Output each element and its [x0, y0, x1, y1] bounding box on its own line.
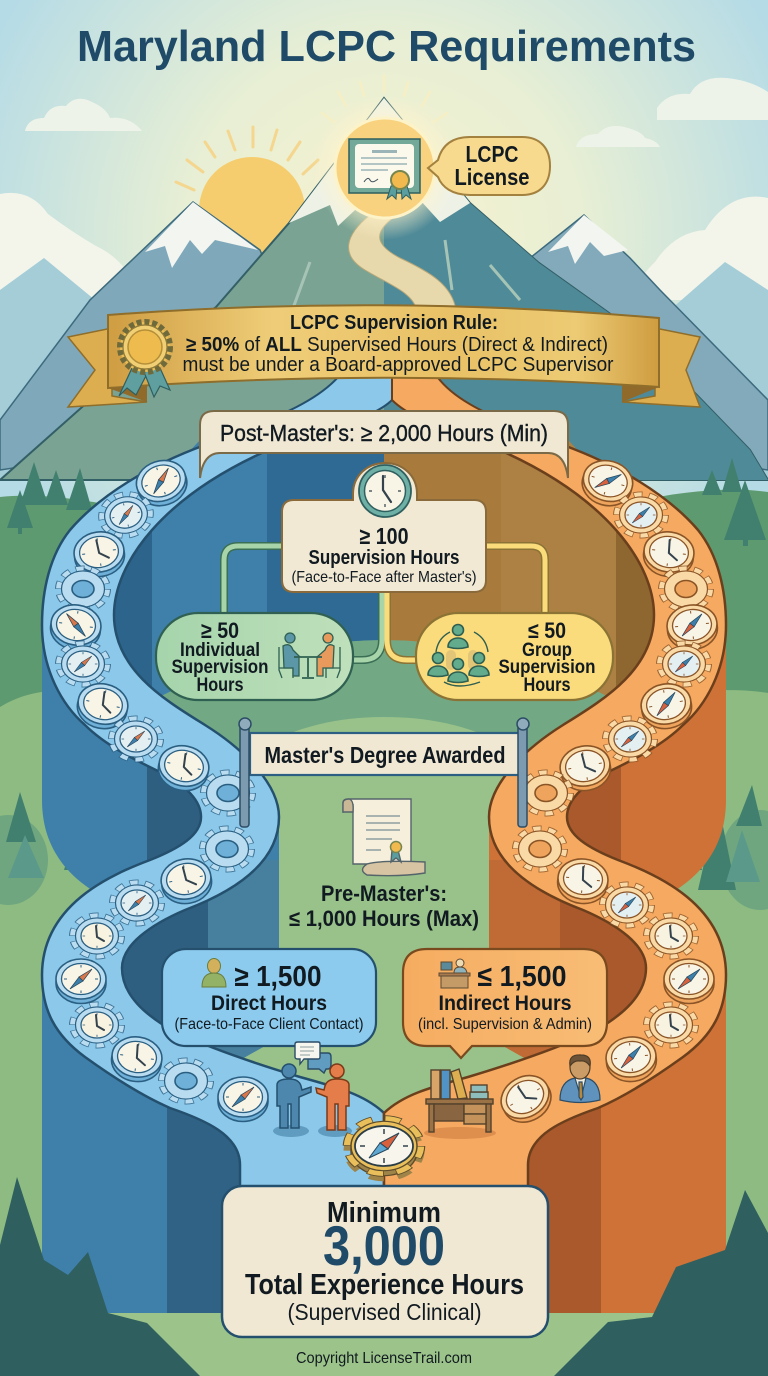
icon: person	[202, 958, 226, 987]
panel: group supervision	[416, 613, 613, 700]
banner: supervision rule	[68, 305, 700, 407]
callout: LCPC License: LCPC	[466, 141, 518, 167]
panel: group supervision: ≤ 50	[528, 618, 566, 643]
orange path milestones	[493, 455, 719, 1131]
sun	[176, 127, 318, 263]
banner: supervision rule: ≥ 50% of ALL Supervised Hours (Direct & Indirect)	[186, 334, 608, 356]
callout: LCPC License	[428, 137, 550, 195]
panel: supervision hours: (Face-to-Face after Master's)	[292, 569, 476, 586]
mountain path to license	[349, 215, 456, 310]
blue winding path	[42, 445, 384, 1190]
icon: two people at a table	[279, 633, 340, 678]
icon: certificate	[349, 139, 420, 199]
panel: indirect hours	[403, 949, 607, 1058]
icon: clock	[359, 465, 411, 517]
center mountain	[0, 98, 768, 480]
panel: individual supervision: Hours	[196, 675, 244, 696]
blue side backdrop	[42, 441, 384, 1313]
heading: pre-master's: Pre-Master's:	[321, 881, 447, 906]
right mountain	[480, 215, 768, 470]
panel: group supervision: Hours	[524, 675, 570, 696]
far mountains	[0, 258, 768, 480]
connector: supervision to individual	[224, 546, 382, 660]
panel: total minimum: Total Experience Hours	[245, 1269, 524, 1301]
dark foreground trees	[0, 1177, 768, 1376]
icon: gold medal	[119, 322, 170, 397]
banner: supervision rule: LCPC Supervision Rule:	[290, 312, 498, 334]
callout: LCPC License: License	[454, 164, 530, 190]
icon: person at desk	[439, 959, 470, 988]
panel: direct hours: ≥ 1,500	[234, 961, 322, 993]
panel: total minimum	[222, 1186, 548, 1337]
panel: total minimum: (Supervised Clinical)	[288, 1299, 482, 1325]
glow rays around license	[322, 75, 447, 122]
icon: diploma scroll	[343, 799, 425, 876]
pine trees	[6, 458, 766, 890]
panel: total minimum: Minimum	[327, 1197, 441, 1229]
connector: supervision to group	[387, 546, 545, 660]
panel: individual supervision: ≥ 50	[201, 618, 239, 643]
green hills	[0, 490, 768, 1376]
orange winding path	[384, 445, 726, 1190]
copyright: Copyright LicenseTrail.com	[296, 1350, 472, 1367]
icon: group of people	[428, 624, 489, 686]
license medallion	[313, 96, 457, 240]
connector highlights	[224, 546, 545, 660]
icon: desk with binders	[424, 1069, 496, 1139]
sign: master's degree awarded	[239, 718, 529, 827]
panel: group supervision: Supervision	[498, 657, 596, 678]
panel: supervision hours	[282, 463, 486, 592]
title: Maryland LCPC Requirements	[77, 22, 696, 71]
left mountain	[0, 202, 330, 470]
panel: indirect hours: (incl. Supervision & Admin)	[418, 1016, 592, 1033]
panel: total minimum: 3,000	[323, 1214, 445, 1277]
heading: pre-master's: ≤ 1,000 Hours (Max)	[289, 906, 479, 931]
icon: central compass gear	[349, 1120, 419, 1177]
river tops below the banner	[205, 375, 563, 445]
panel: direct hours: (Face-to-Face Client Contact)	[174, 1016, 364, 1033]
panel: indirect hours: Indirect Hours	[438, 992, 572, 1015]
panel: individual supervision: Individual	[180, 640, 260, 661]
panel: direct hours: Direct Hours	[211, 992, 327, 1015]
heading: post-master's: Post-Master's: ≥ 2,000 Hours (Min)	[220, 420, 548, 446]
icon: supervisor in suit	[560, 1055, 600, 1102]
panel: supervision hours: Supervision Hours	[308, 547, 460, 569]
banner: supervision rule: must be under a Board-approved LCPC Supervisor	[182, 354, 614, 376]
panel: group supervision: Group	[522, 640, 572, 661]
heading: post-master's	[200, 411, 568, 478]
clouds	[0, 78, 768, 300]
panel: indirect hours: ≤ 1,500	[478, 961, 566, 993]
panel: individual supervision: Supervision	[172, 657, 268, 678]
panel: direct hours	[162, 949, 376, 1046]
icon: speech bubbles	[295, 1042, 331, 1073]
panel: supervision hours: ≥ 100	[360, 523, 408, 549]
blue path milestones	[48, 454, 268, 1122]
panel: individual supervision	[156, 613, 353, 700]
orange side backdrop	[384, 441, 726, 1313]
sign: master's degree awarded: Master's Degree Awarded	[264, 742, 506, 768]
heading: pre-master's	[289, 881, 479, 931]
icon: two people talking	[273, 1042, 352, 1137]
sky background	[0, 0, 768, 520]
